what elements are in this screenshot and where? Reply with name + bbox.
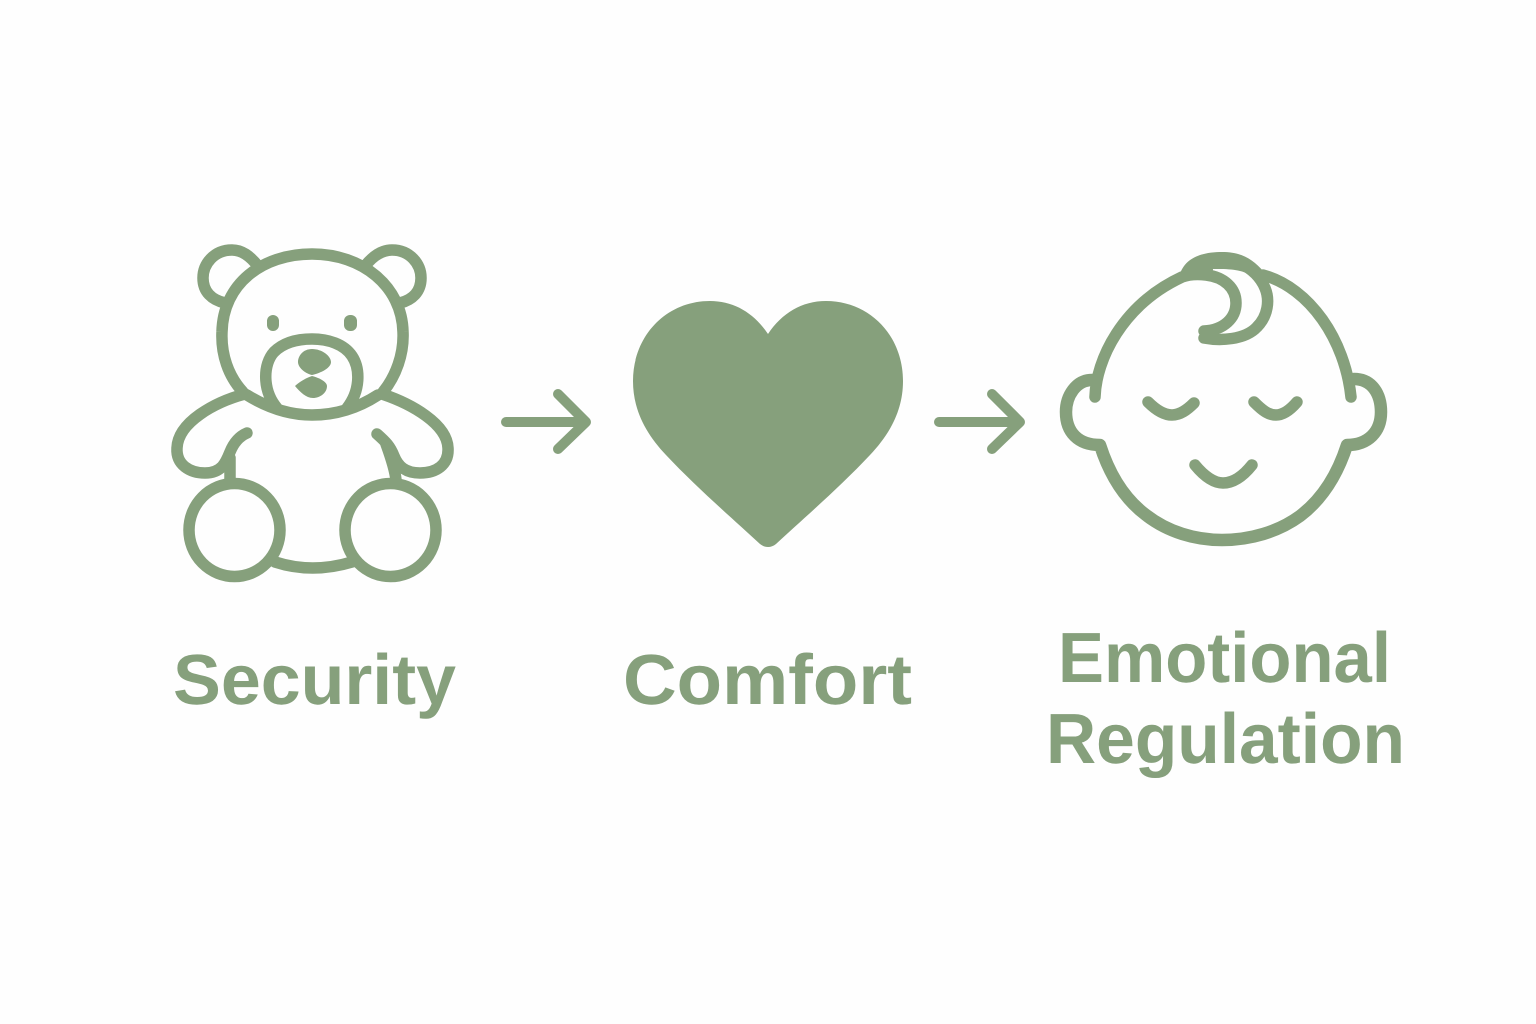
arrow: comfort to emotional regulation xyxy=(939,394,1020,449)
label: security: Security xyxy=(173,641,457,720)
icon: heart xyxy=(633,301,903,547)
label: emotional regulation: Regulation xyxy=(1046,700,1405,779)
label: emotional regulation: Emotional xyxy=(1058,619,1391,698)
label: comfort: Comfort xyxy=(623,641,912,720)
icon: baby face xyxy=(1066,252,1381,540)
arrow: security to comfort xyxy=(506,394,586,449)
icon: teddy bear xyxy=(177,250,448,576)
label: emotional regulation xyxy=(1046,619,1405,779)
